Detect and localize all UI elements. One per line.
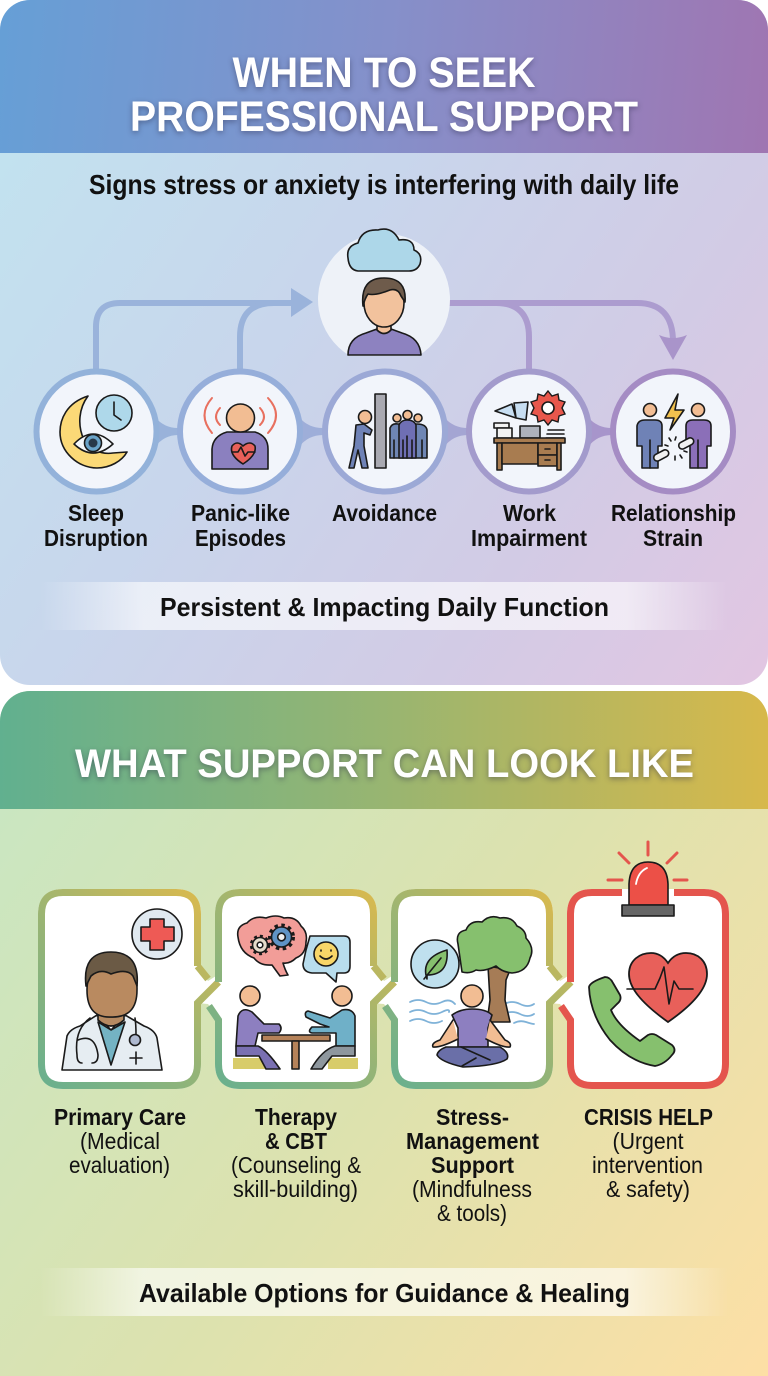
label: primary care: Primary Care <box>54 1104 186 1130</box>
connectors between circles <box>155 417 612 447</box>
label: stress-management support: Support <box>431 1152 514 1178</box>
label: sleep disruption: Sleep <box>68 500 124 526</box>
label: stress-management support <box>406 1104 539 1226</box>
label: therapy and cbt: (Counseling & <box>231 1152 361 1178</box>
icon: green phone handset <box>589 977 674 1066</box>
icon: doctor with medical cross <box>62 909 182 1070</box>
label: stress-management support: Management <box>406 1128 539 1154</box>
circle: relationship strain <box>611 372 736 551</box>
label: therapy and cbt: & CBT <box>265 1128 327 1154</box>
label: therapy and cbt: Therapy <box>255 1104 337 1130</box>
label: stress-management support: Stress- <box>436 1104 509 1130</box>
circle: panic-like episodes <box>180 372 300 551</box>
label: crisis help <box>584 1104 713 1202</box>
label: panic-like episodes: Panic-like <box>191 500 290 526</box>
callout band: persistent and impacting: Persistent & Impacting Daily Function <box>160 592 609 622</box>
label: work impairment <box>471 500 587 551</box>
title: when to seek professional support <box>130 49 638 141</box>
callout band: available options <box>40 1268 728 1316</box>
label: panic-like episodes: Episodes <box>195 525 286 551</box>
label: crisis help: (Urgent <box>612 1128 684 1154</box>
label: stress-management support: (Mindfulness <box>412 1176 532 1202</box>
icon: person with racing heart <box>204 398 276 469</box>
panel: when to seek support <box>0 0 768 685</box>
icon: messy desk with gear <box>494 391 565 470</box>
icon: moon, clock and eye <box>60 395 132 468</box>
label: panic-like episodes <box>191 500 290 551</box>
title: when to seek professional support: PROFESSIONAL SUPPORT <box>130 93 638 141</box>
label: crisis help: intervention <box>592 1152 703 1178</box>
header band: bottom panel <box>0 691 768 809</box>
card white backgrounds and junctions <box>38 889 729 1089</box>
card: stress-management support <box>385 892 571 1226</box>
title: when to seek professional support: WHEN TO SEEK <box>232 49 536 97</box>
callout band: persistent and impacting <box>40 582 728 630</box>
icon: red siren <box>608 842 687 916</box>
icon: two people at a table <box>233 986 358 1069</box>
card: therapy and cbt <box>209 892 394 1202</box>
label: primary care <box>54 1104 186 1178</box>
label: therapy and cbt <box>231 1104 361 1202</box>
label: crisis help: CRISIS HELP <box>584 1104 713 1130</box>
icon: central stressed person with cloud <box>318 229 450 356</box>
card: primary care <box>42 892 218 1178</box>
icon: two people with broken chain and lightning <box>637 394 711 468</box>
label: relationship strain: Strain <box>643 525 703 551</box>
circle: work impairment <box>469 372 589 551</box>
circle: avoidance <box>325 372 445 526</box>
label: relationship strain <box>611 500 736 551</box>
label: therapy and cbt: skill-building) <box>233 1176 358 1202</box>
subheading: signs: Signs stress or anxiety is interfering with daily life <box>89 169 679 200</box>
label: stress-management support: & tools) <box>437 1200 507 1226</box>
label: avoidance: Avoidance <box>332 500 437 526</box>
card: crisis help <box>561 842 726 1202</box>
icon: figure hiding behind wall from group <box>349 394 427 468</box>
label: primary care: evaluation) <box>69 1152 170 1178</box>
label: relationship strain: Relationship <box>611 500 736 526</box>
icon: heart with pulse <box>627 953 707 1022</box>
label: work impairment: Work <box>503 500 556 526</box>
arrows out of central person <box>448 303 687 372</box>
circle: sleep disruption <box>36 372 156 551</box>
title: what support can look like: WHAT SUPPORT CAN LOOK LIKE <box>75 742 694 786</box>
label: sleep disruption <box>44 500 148 551</box>
label: sleep disruption: Disruption <box>44 525 148 551</box>
icon: meditating person under tree <box>410 917 534 1067</box>
panel: what support can look like <box>0 691 768 1376</box>
label: crisis help: & safety) <box>606 1176 690 1202</box>
callout band: available options: Available Options for Guidance & Healing <box>139 1278 630 1308</box>
header band: top panel <box>0 0 768 153</box>
icon: brain and speech bubble <box>238 916 350 982</box>
label: work impairment: Impairment <box>471 525 587 551</box>
label: primary care: (Medical <box>80 1128 160 1154</box>
arrows into central person <box>96 288 313 372</box>
